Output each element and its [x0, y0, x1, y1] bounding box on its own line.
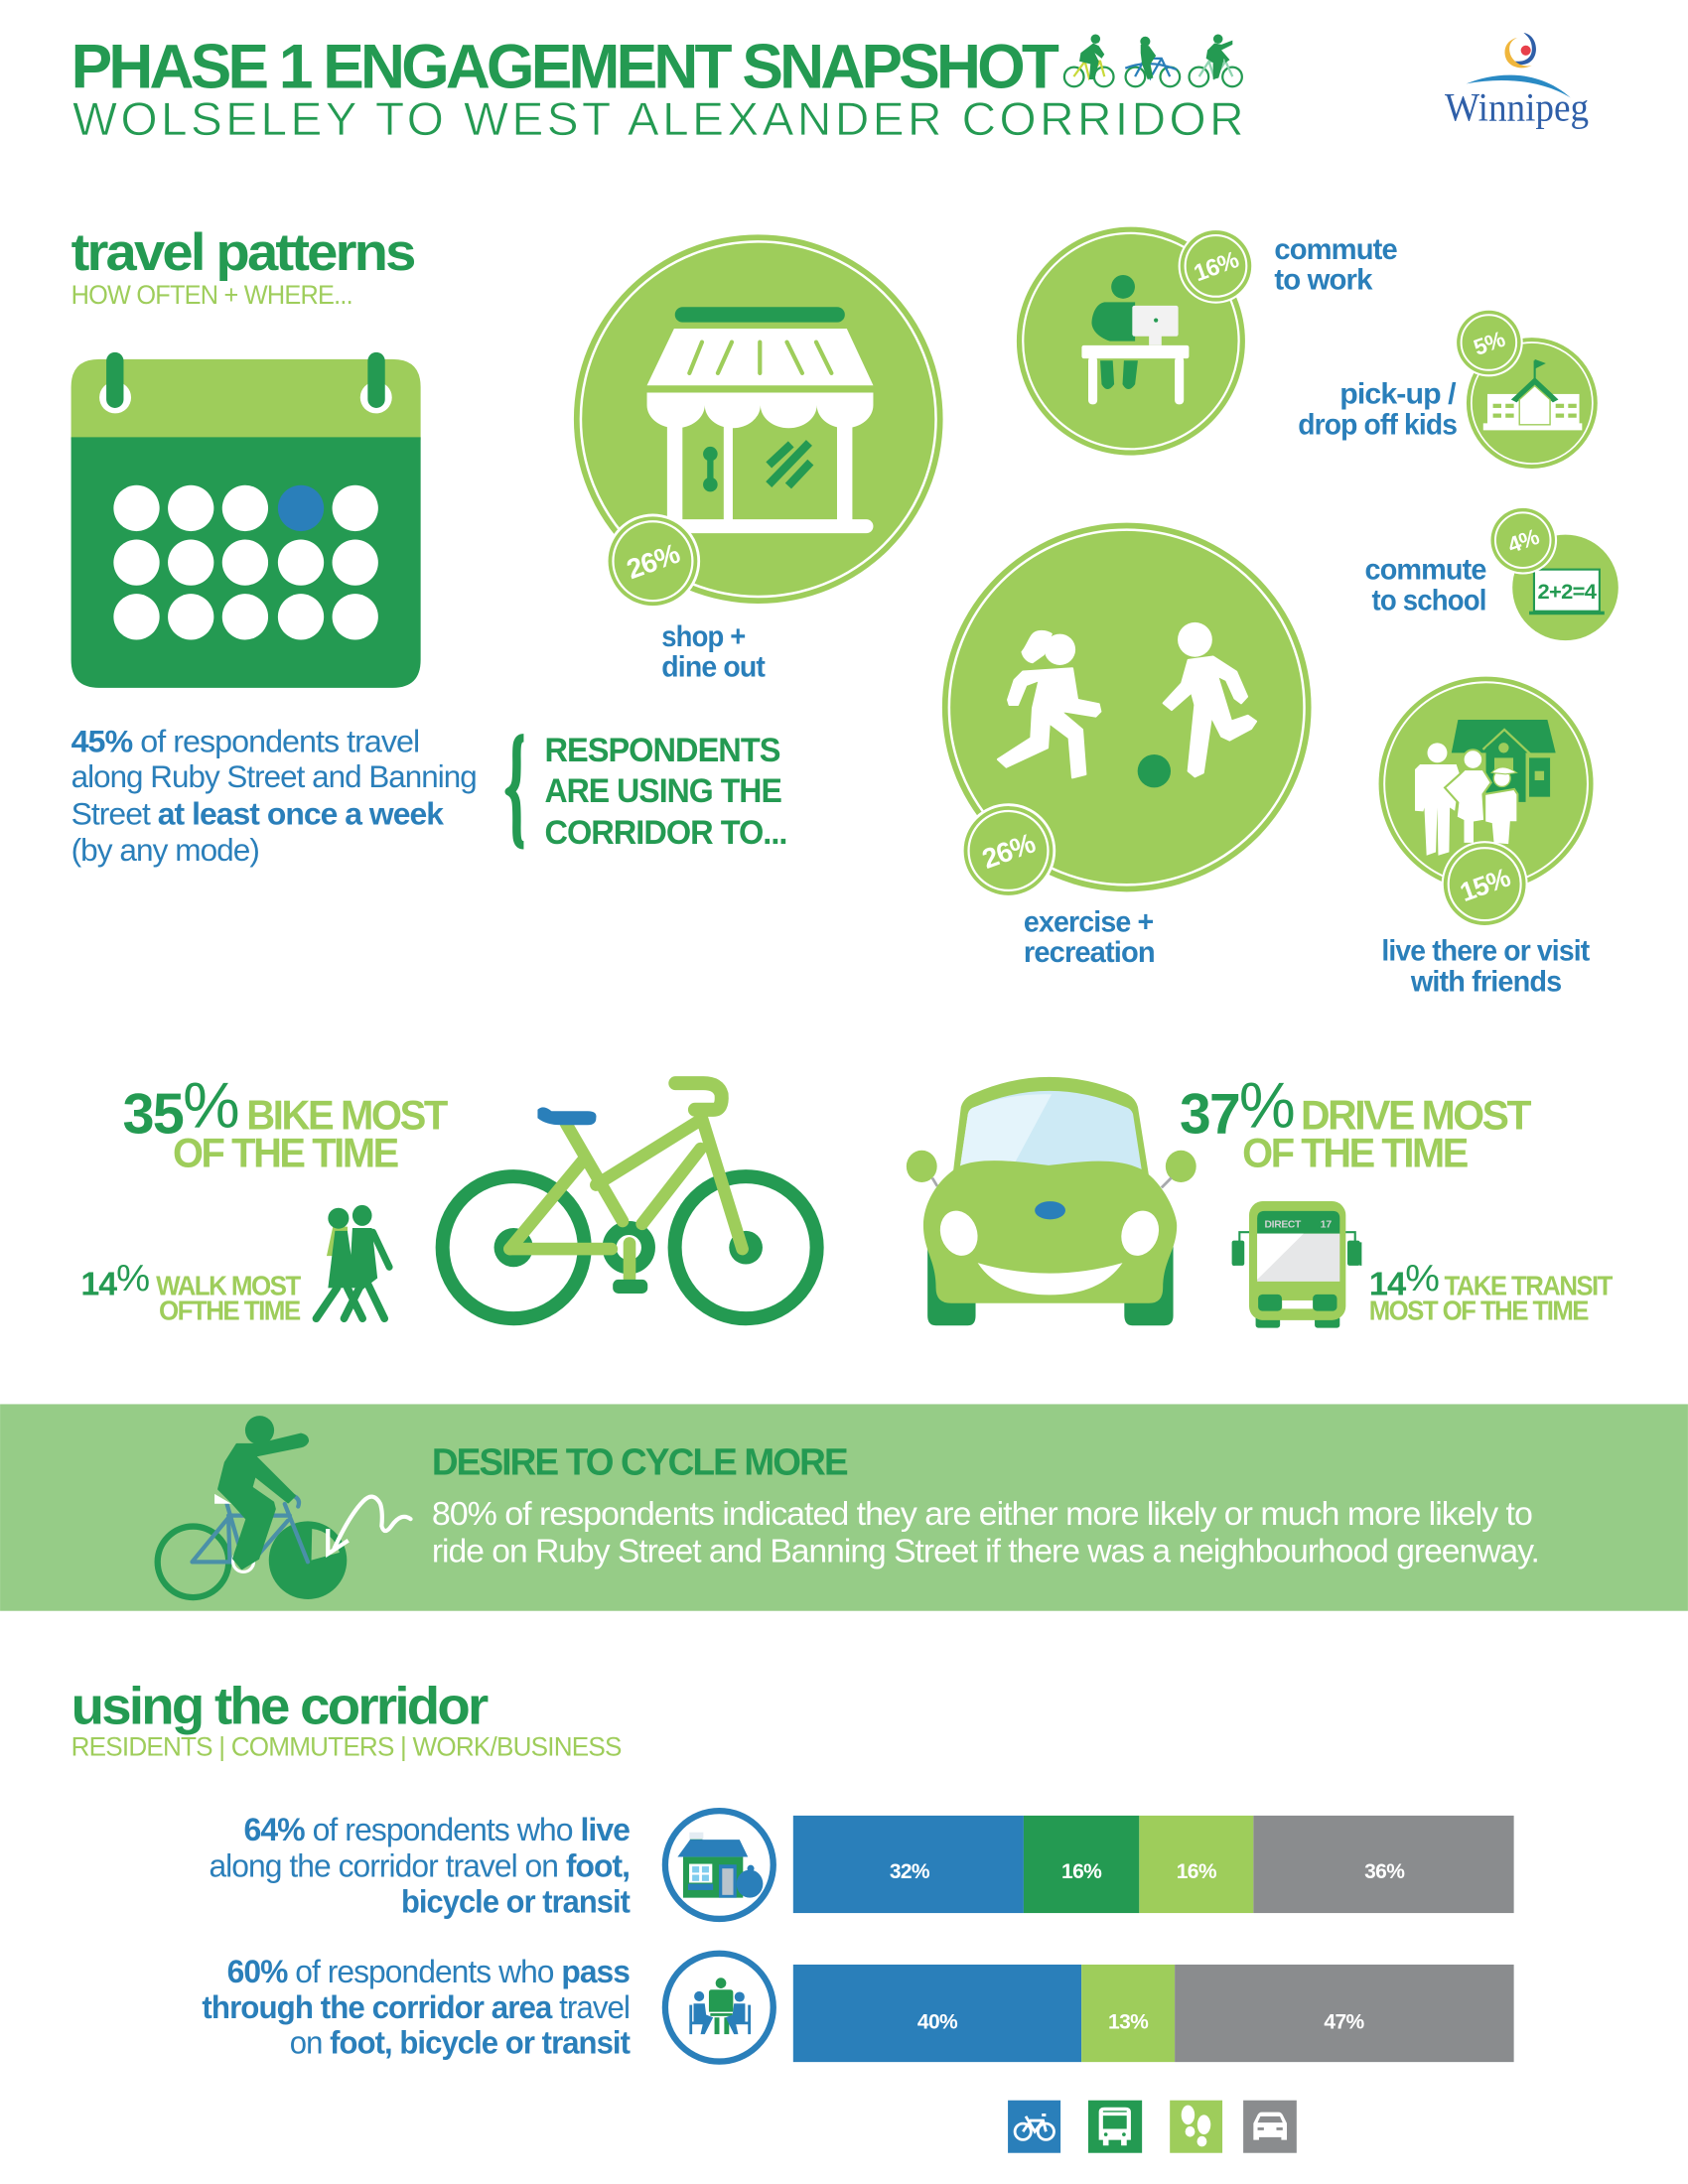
icon: bus: DIRECT — [1265, 1218, 1302, 1230]
text: 45% of respondents — [71, 723, 477, 868]
label: commute to school: to school — [1372, 584, 1486, 616]
badge: 15% — [1442, 841, 1528, 927]
circle: live there or visit — [1379, 677, 1594, 927]
label: exercise and recreation: recreation — [1024, 936, 1155, 969]
stacked bar: pass through: 13% — [1108, 2010, 1149, 2033]
icon: calendar — [71, 352, 421, 688]
logo: Winnipeg — [1445, 33, 1589, 130]
text: 64% who live along the corridor: bicycle or transit — [401, 1883, 631, 1919]
stat: 37% drive most of the time: DRIVE MOST — [1301, 1092, 1531, 1138]
icon: person at desk — [1081, 275, 1189, 404]
stat: 14% take transit most of the time: TAKE TRANSIT — [1444, 1270, 1614, 1300]
title — [71, 32, 1244, 146]
heading: using the corridor — [71, 1677, 622, 1762]
logo: Winnipeg: Winnipeg — [1445, 85, 1589, 130]
label: shop and dine out — [661, 620, 766, 684]
stat: 14% walk most of the time: OFTHE TIME — [159, 1296, 301, 1326]
label: shop and dine out: shop + — [661, 620, 745, 653]
stat: 35% bike most of the time: BIKE MOST — [246, 1092, 448, 1138]
stacked bar: residents: 32% — [890, 1860, 930, 1883]
stacked bar: residents: 16% — [1061, 1860, 1102, 1883]
stat: 14% walk most of the time: WALK MOST — [156, 1270, 301, 1300]
stacked bar: residents: 16% — [1177, 1860, 1217, 1883]
badge: 26%: 26% — [978, 827, 1040, 875]
icon: smiling car — [907, 1077, 1196, 1325]
badge: 26% — [606, 514, 700, 609]
brace — [509, 738, 523, 845]
text: respondents are using the corridor to — [544, 732, 786, 852]
text: desire to cycle more: DESIRE TO CYCLE MORE — [432, 1441, 847, 1483]
heading: using the corridor: using the corridor — [71, 1677, 489, 1735]
circle: shop and dine out — [574, 234, 943, 609]
badge: 16%: 16% — [1191, 246, 1242, 287]
label: exercise and recreation — [1024, 905, 1155, 969]
label: commute to work: to work — [1274, 264, 1373, 297]
text: 45% of respondents: along Ruby Street and Banning — [71, 758, 477, 794]
badge: 15%: 15% — [1456, 863, 1514, 907]
icon: walking couple — [316, 1205, 389, 1318]
stat: 14% walk most of the time: % — [116, 1258, 149, 1299]
text: 64% who live along the corridor: 64% of respondents who live — [244, 1812, 630, 1847]
badge: 16% — [1179, 228, 1253, 304]
text: respondents are using the corridor to: CORRIDOR TO... — [544, 814, 786, 852]
text: 60% who pass through: through the corridor area travel — [202, 1989, 630, 2025]
heading: travel patterns — [71, 223, 415, 310]
stat: 35% bike most of the time: 35 — [122, 1083, 183, 1147]
text: respondents are using the corridor to: ARE USING THE — [544, 772, 781, 810]
stat: 14% take transit most of the time — [1369, 1258, 1614, 1326]
icon: house in circle — [665, 1811, 774, 1919]
text: 45% of respondents: 45% of respondents travel — [71, 723, 419, 758]
text: 60% who pass through: 60% of respondents who pass — [227, 1954, 630, 1989]
stacked bar: pass through — [793, 1965, 1514, 2062]
label: live there or visit: live there or visit — [1381, 935, 1590, 968]
stacked bar: pass through: 40% — [917, 2010, 958, 2033]
badge: 5% — [1455, 309, 1523, 376]
stacked bar: residents — [793, 1816, 1514, 1913]
stat: 14% take transit most of the time: 14 — [1369, 1266, 1404, 1302]
label: pick-up drop off kids — [1298, 378, 1458, 442]
heading: using the corridor: RESIDENTS | COMMUTERS | WORK/BUSINESS — [71, 1732, 622, 1762]
arrow — [328, 1497, 411, 1554]
label: commute to work — [1274, 233, 1397, 297]
circle: commute to work — [1017, 227, 1253, 456]
title: WOLSELEY TO WEST ALEXANDER CORRIDOR — [72, 93, 1244, 146]
text: 45% of respondents: Street at least once a week — [71, 795, 444, 831]
label: live there or visit — [1381, 935, 1590, 999]
legend: bus — [1088, 2101, 1142, 2153]
label: commute to work: commute — [1274, 233, 1397, 266]
heading: travel patterns: HOW OFTEN + WHERE... — [71, 280, 352, 310]
legend — [1008, 2101, 1297, 2153]
stat: 35% bike most of the time: % — [183, 1069, 238, 1141]
icon: three cyclists — [1064, 35, 1242, 86]
badge: 26% — [961, 803, 1055, 898]
badge: 4%: 4% — [1504, 524, 1543, 558]
badge: 5%: 5% — [1471, 327, 1508, 360]
circle: pick-up drop off kids — [1455, 309, 1598, 469]
icon: family and house — [1415, 720, 1556, 856]
icon: bus: 17 — [1321, 1218, 1332, 1230]
stat: 37% drive most of the time — [1180, 1069, 1531, 1175]
stat: 37% drive most of the time: 37 — [1180, 1083, 1240, 1147]
label: shop and dine out: dine out — [661, 651, 766, 684]
icon: bicycle — [443, 1083, 817, 1318]
stat: 35% bike most of the time: OF THE TIME — [173, 1130, 398, 1175]
label: commute to school: commute — [1365, 553, 1486, 586]
text: desire to cycle more — [432, 1441, 1539, 1570]
stat: 37% drive most of the time: % — [1239, 1069, 1294, 1141]
badge: 26%: 26% — [623, 537, 684, 585]
circle: exercise and recreation — [942, 523, 1312, 898]
label: pick-up drop off kids: drop off kids — [1298, 409, 1458, 442]
icon: cyclist with wheel chart — [158, 1416, 411, 1599]
legend: footprints — [1170, 2101, 1222, 2153]
title: PHASE 1 ENGAGEMENT SNAPSHOT — [71, 32, 1058, 101]
label: commute to school — [1365, 553, 1486, 616]
panel: desire to cycle more — [0, 1404, 1688, 1611]
icon: school — [1483, 359, 1582, 430]
circle: commute to school — [1488, 506, 1618, 640]
heading: travel patterns: travel patterns — [71, 223, 415, 282]
stat: 14% take transit most of the time: % — [1405, 1258, 1439, 1299]
text: 45% of respondents: (by any mode) — [71, 832, 259, 868]
stat: 14% walk most of the time — [80, 1258, 301, 1326]
icon: two people and ball — [998, 622, 1256, 787]
text: 60% who pass through: on foot, bicycle or transit — [290, 2025, 631, 2061]
legend: bicycle — [1008, 2101, 1060, 2153]
icon: storefront — [647, 307, 873, 533]
icon: meeting in circle — [665, 1954, 774, 2062]
legend: car — [1243, 2101, 1297, 2153]
label: exercise and recreation: exercise + — [1024, 905, 1153, 938]
text: respondents are using the corridor to: RESPONDENTS — [544, 732, 780, 769]
stat: 14% take transit most of the time: MOST OF THE TIME — [1369, 1296, 1589, 1326]
stat: 37% drive most of the time: OF THE TIME — [1242, 1130, 1468, 1175]
stacked bar: residents: 36% — [1364, 1860, 1405, 1883]
text: 60% who pass through — [202, 1954, 631, 2061]
icon: chalkboard: 2+2=4 — [1537, 581, 1597, 604]
label: pick-up drop off kids: pick-up / — [1339, 378, 1456, 411]
icon: bus — [1232, 1201, 1360, 1328]
stacked bar: pass through: 47% — [1324, 2010, 1365, 2033]
stat: 14% walk most of the time: 14 — [80, 1266, 116, 1302]
stat: 35% bike most of the time — [122, 1069, 448, 1175]
label: live there or visit: with friends — [1410, 966, 1562, 999]
text: 64% who live along the corridor: along the corridor travel on foot, — [209, 1848, 630, 1884]
text: desire to cycle more: ride on Ruby Street and Banning Street if there was a neighbourhood greenway. — [432, 1534, 1539, 1570]
text: desire to cycle more: 80% of respondents indicated they are either more likely or much more likely to — [432, 1496, 1532, 1533]
text: 64% who live along the corridor — [209, 1812, 631, 1919]
